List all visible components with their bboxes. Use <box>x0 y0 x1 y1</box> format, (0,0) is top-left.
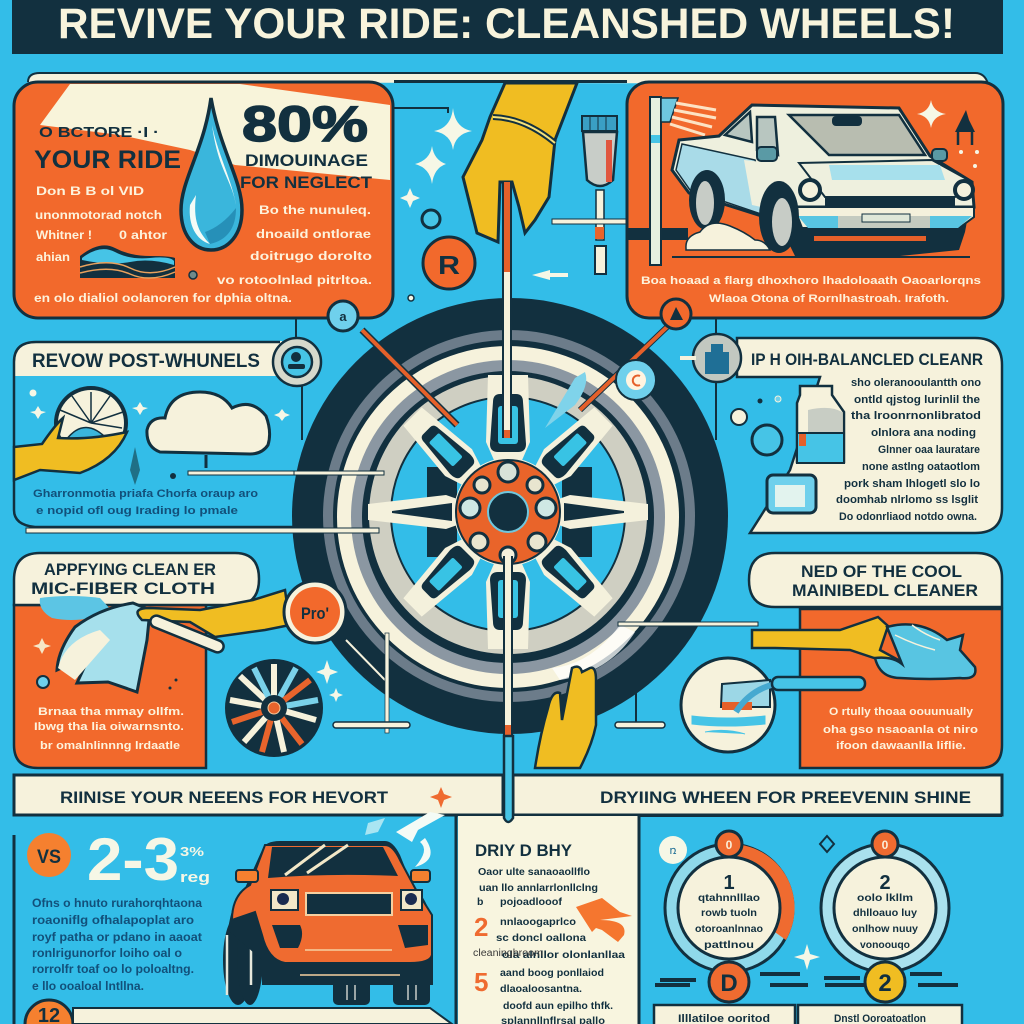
body text: doofd aun epilho thfk. <box>503 1000 613 1012</box>
windshield <box>268 847 398 878</box>
heading: MIC-FIBER CLOTH <box>31 579 215 598</box>
splash on rim <box>545 372 586 428</box>
wheel spokes <box>368 375 648 649</box>
swirl badge <box>616 360 656 400</box>
body text: pojoadlooof <box>500 896 563 908</box>
statistic: 80%: DIMOUINAGE <box>245 151 368 170</box>
panel: dry by hand <box>458 816 638 1024</box>
sparkle and ornament <box>794 836 834 970</box>
left text: Don B B ol VID <box>36 186 144 198</box>
connector strip above the top panels <box>28 73 988 84</box>
magnifier badge <box>328 301 358 331</box>
body text: aand boog ponllaiod <box>500 967 604 979</box>
step 1 circle: D <box>720 970 738 997</box>
caption: O rtully thoaa oouunually <box>829 706 974 718</box>
right text: vo rotoolnlad pitrltoa. <box>217 275 372 287</box>
numerals <box>474 912 488 997</box>
step 1 circle: otoroanlnnao <box>695 923 763 935</box>
body text <box>32 896 202 993</box>
body text <box>477 866 625 1024</box>
body text: b <box>477 896 483 908</box>
connector lines and sparkles, top centre <box>393 108 472 301</box>
gloved hand with cloth, right <box>618 617 975 679</box>
icon: connector badge <box>680 334 741 382</box>
caption <box>823 706 978 752</box>
body text: Do odonrliaod notdo owna. <box>839 511 977 523</box>
watermark: cleaningbroom <box>473 948 543 959</box>
mirrors <box>757 147 777 161</box>
body text: uan llo annlarrlonllclng <box>479 882 598 894</box>
right text <box>34 205 372 305</box>
gloved hand on rim <box>535 667 596 768</box>
band: rinse and drying <box>14 775 1002 815</box>
caption <box>34 706 184 752</box>
caption: Boa hoaad a flarg dhoxhoro lhadoloaath Oaoarlorqns <box>641 275 981 287</box>
panel: post wheels <box>14 338 321 527</box>
body text: ola alnllor olonlanllaa <box>502 949 625 961</box>
polish gloss on rim <box>552 625 635 680</box>
heading: before your ride: O BCTORE ·I · <box>39 124 159 141</box>
panel: microfiber cloth <box>14 553 290 768</box>
left text <box>35 186 168 264</box>
callout lines to wheel <box>362 327 667 425</box>
wheel <box>292 298 728 734</box>
mirrors <box>236 870 258 882</box>
wheels <box>223 911 430 1005</box>
badge: pro: Pro' <box>301 604 329 623</box>
bottom cream strip <box>73 1008 452 1024</box>
wheel hub <box>454 458 562 566</box>
step 1 circle: 1 <box>723 872 735 894</box>
body text: none astlng oataotlom <box>862 461 980 473</box>
icon: cloth and glove <box>40 590 290 692</box>
numerals: 5 <box>474 967 488 997</box>
heading: drying: DRYIING WHEEN FOR PREEVENIN SHINE <box>600 788 971 807</box>
statistic: 80%: FOR NEGLECT <box>240 173 373 192</box>
caption: Ibwg tha lia oiwarnsnto. <box>34 721 184 733</box>
left text: ahian <box>36 252 70 264</box>
body text: royf patha or pdano in aaoat <box>32 930 202 944</box>
left text: unonmotorad notch <box>35 210 162 222</box>
icon: gloved hand with brush <box>14 386 128 480</box>
step 2 circle: dhlloauo luy <box>853 907 917 919</box>
windshield <box>789 115 925 155</box>
sparkles near brush <box>316 660 343 702</box>
heading: MAINIBEDL CLEANER <box>792 582 978 600</box>
side panels <box>676 144 770 217</box>
orange body <box>232 845 432 963</box>
icon: water swirl <box>365 812 445 867</box>
badge: step R: R <box>438 250 460 280</box>
caption: e nopid ofl oug Irading lo pmale <box>36 505 238 517</box>
caption: Wlaoa Otona of Rornlhastroah. Irafoth. <box>709 293 949 305</box>
dark chassis <box>228 841 433 985</box>
headlights <box>271 890 298 910</box>
body text: Glnner oaa lauratare <box>878 444 980 456</box>
heading: before your ride <box>34 124 181 174</box>
body text: tha lroonrnonlibratod <box>851 410 981 422</box>
body text: dlaoaloosantna. <box>500 983 582 995</box>
panel: ph balanced cleaner <box>680 334 1002 533</box>
body text: sho oleranooulantth ono <box>851 377 981 389</box>
badge: vs: VS <box>37 847 61 868</box>
body text: rorrolfr toaf oo lo poloaltng. <box>32 962 194 976</box>
bottom label boxes <box>654 1005 962 1024</box>
panel connector lines <box>296 318 716 440</box>
step 2 circle: 2 <box>879 872 891 894</box>
heading <box>792 563 978 600</box>
badge: pro <box>284 581 346 643</box>
caption: ifoon dawaanlla liflie. <box>836 740 966 752</box>
step 2 circle: oolo lkllm <box>857 892 913 904</box>
icon: orange sparkle <box>430 787 452 808</box>
badge: person icon <box>273 338 321 386</box>
icon: brush tool <box>532 116 642 280</box>
icon: cloud <box>147 392 270 454</box>
headlights <box>800 180 820 200</box>
body text: sc doncl oallona <box>496 932 586 944</box>
step 1 circle: 0 <box>726 838 733 852</box>
car body <box>672 105 974 222</box>
sparkle and dots <box>33 638 178 690</box>
pointer line <box>170 455 294 479</box>
numerals: 2 <box>474 912 488 942</box>
caption <box>33 488 258 517</box>
rod tip <box>504 736 513 822</box>
step 2 circle <box>821 831 958 1002</box>
icon: spray wand <box>650 97 716 265</box>
body text: ontld qjstog lurinlil the <box>854 394 980 406</box>
body text: nnlaoogaprlco <box>500 916 576 928</box>
heading: REVOW POST-WHUNELS <box>32 351 260 372</box>
step 2 circle: onlhow nuuy <box>852 923 918 935</box>
right text: Bo the nunuleq. <box>259 205 371 217</box>
badge: triangle marker <box>661 299 691 329</box>
step 2 circle: 0 <box>882 838 889 852</box>
body text: doomhab nlrlomo ss lsglit <box>836 494 978 506</box>
step 1 circle <box>655 831 808 1002</box>
body text <box>836 377 981 523</box>
panel: car wash <box>627 82 1003 318</box>
bumper <box>794 207 974 228</box>
wheels <box>689 170 725 230</box>
lower vertical rod <box>503 556 513 736</box>
grille band <box>825 197 955 207</box>
heading: rinse: RIINISE YOUR NEEENS FOR HEVORT <box>60 788 389 807</box>
panel: drying steps <box>639 816 1002 1024</box>
panel: microfiber cleaner <box>749 553 1002 768</box>
sparkles <box>30 390 290 421</box>
statistic: 80% <box>240 96 373 192</box>
badge: step R <box>423 237 475 289</box>
icon: cleaner jar <box>767 475 816 513</box>
heading: before your ride: YOUR RIDE <box>34 146 181 174</box>
small note badge: ռ <box>669 845 677 857</box>
bottom badge <box>25 1000 73 1024</box>
icon: polish disc with applicator <box>681 658 865 752</box>
body text: Ofns o hnuto rurahorqhtaona <box>32 896 202 910</box>
icon: foam <box>686 223 770 250</box>
heading: NED OF THE COOL <box>801 563 962 581</box>
illustration: orange suv <box>223 841 433 1005</box>
gloved hand holding brush rod <box>463 83 577 242</box>
step 1 circle: rowb tuoln <box>701 907 757 919</box>
panel: rinse <box>14 812 456 1024</box>
body text: pork sham lhlogetl slo lo <box>844 478 980 490</box>
body text: Oaor ulte sanaoaollflo <box>478 866 590 878</box>
undercarriage <box>770 205 970 256</box>
heading <box>31 560 216 598</box>
left text: Whitner ! <box>36 230 92 242</box>
rim pointer lines <box>26 471 384 533</box>
caption: br omalnlinnng lrdaatle <box>40 740 180 752</box>
body text: ronlrigunorfor loiho oal o <box>32 946 182 960</box>
grille <box>306 893 392 915</box>
body text: e llo ooaloal lntllna. <box>32 979 144 993</box>
left text: 0 ahtor <box>119 230 168 242</box>
badge: vs <box>27 833 71 877</box>
panel: before your ride <box>14 82 393 318</box>
right text: en olo dialiol oolanoren for dphia oltna. <box>34 293 292 305</box>
heading: APPFYING CLEAN ER <box>44 560 216 579</box>
icon: sparkle and figure <box>917 100 979 168</box>
statistic: 2-3: 2-3 <box>87 826 179 893</box>
hood <box>799 160 972 197</box>
heading: IP H OIH-BALANCLED CLEANR <box>751 350 983 369</box>
icon: radial brush <box>225 659 323 757</box>
statistic: 2-3: 3% <box>180 844 205 859</box>
heading: DRIY D BHY <box>475 841 573 860</box>
caption <box>641 275 981 305</box>
lower wheel lines <box>333 633 665 733</box>
icon: cleaner bottle <box>797 386 844 463</box>
magnifier badge: a <box>339 309 347 324</box>
statistic: 80%: 80% <box>242 96 368 152</box>
arrow <box>576 898 632 942</box>
icon: bubbles <box>731 396 782 455</box>
statistic: 2-3: reg <box>180 869 210 886</box>
step 2 circle: 2 <box>878 970 892 997</box>
icon: water drop <box>181 98 242 250</box>
step 2 circle: vonoouqo <box>860 939 910 951</box>
right text: doitrugo dorolto <box>250 251 372 263</box>
brake caliper blocks <box>427 467 592 557</box>
vertical rod <box>502 182 512 438</box>
step 1 circle: pattlnou <box>704 939 754 951</box>
step 1 circle: qtahnnlllao <box>698 892 760 904</box>
title banner: REVIVE YOUR RIDE: CLEANSHED WHEELS! <box>58 0 955 48</box>
body text: olnlora ana noding <box>871 427 976 439</box>
caption: Gharronmotia priafa Chorfa oraup aro <box>33 488 258 500</box>
bumper vents <box>272 925 428 948</box>
icon: layered waves <box>80 245 175 278</box>
small note badge <box>659 836 687 864</box>
body text: roaoniflg ofhalapoplat aro <box>32 913 194 927</box>
caption: oha gso nsaoanla ot niro <box>823 724 978 736</box>
caption: Brnaa tha mmay ollfm. <box>38 706 184 718</box>
right text: dnoaild ontlorae <box>256 229 371 241</box>
illustration: sedan car <box>672 105 974 258</box>
